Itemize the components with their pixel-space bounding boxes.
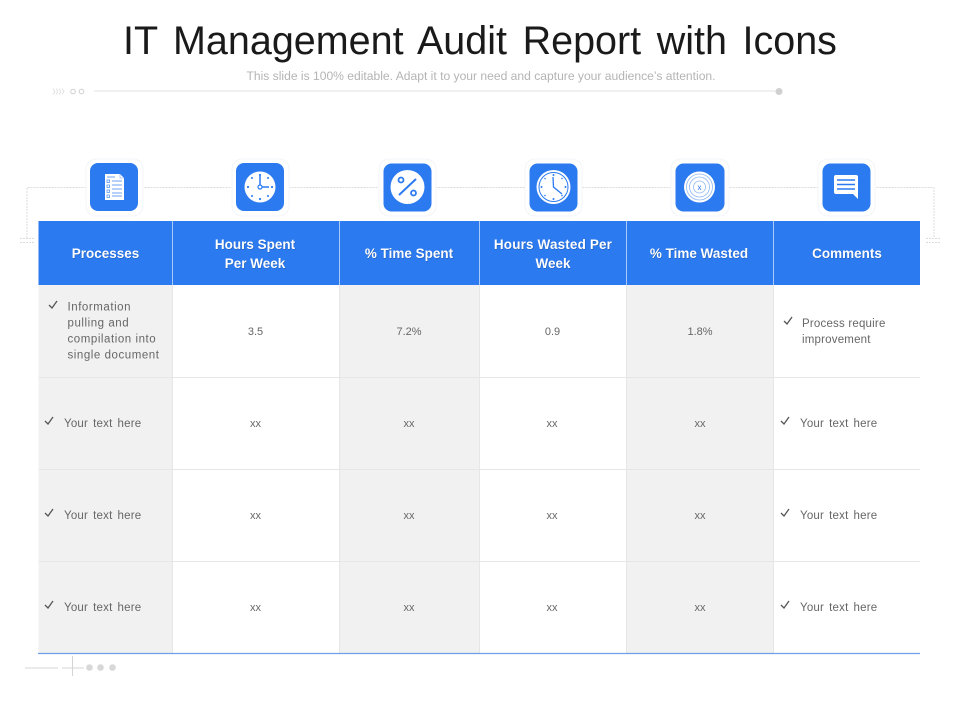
table header: % Time Wasted <box>650 246 748 261</box>
row 4 text: xx <box>546 602 558 614</box>
icon: coin target: x <box>698 183 702 192</box>
row 1 text: improvement <box>802 334 871 346</box>
row 4 text: Your text here <box>64 602 141 614</box>
grid lines <box>38 285 920 653</box>
row 3 text: Your text here <box>800 510 877 522</box>
row 1 text: single document <box>68 350 160 362</box>
table header: Week <box>536 256 571 272</box>
icon: percent <box>379 159 436 216</box>
table header: Hours Wasted Per <box>494 237 613 252</box>
row 1 text: Process require <box>802 318 886 330</box>
row 1 text: 7.2% <box>396 326 422 338</box>
table header: Per Week <box>225 256 286 272</box>
table header: Hours Spent <box>215 238 296 252</box>
row 2 text: xx <box>250 418 262 430</box>
table header: Hours Spent <box>215 237 296 252</box>
row 1 text: compilation into <box>68 334 156 346</box>
row 1 text: 3.5 <box>248 326 263 338</box>
table header: Comments <box>812 246 882 261</box>
icon: coin target <box>671 159 729 216</box>
table header: Processes <box>72 246 140 262</box>
table header: Hours Wasted Per <box>494 238 613 252</box>
header divider ornament <box>53 88 782 95</box>
table header: Processes <box>72 246 139 261</box>
icon: document <box>86 159 143 216</box>
table header: % Time Wasted <box>650 246 749 262</box>
row 2 text: xx <box>404 418 415 430</box>
table header: % Time Spent <box>365 246 454 261</box>
title: IT Management Audit Report with Icons <box>123 19 837 63</box>
table header: % Time Spent <box>365 246 454 262</box>
shaded columns <box>38 285 774 653</box>
table header <box>38 221 920 285</box>
table header: Week <box>535 256 571 271</box>
table header: Comments <box>813 246 882 262</box>
row 2 text: Your text here <box>800 418 877 430</box>
table body <box>38 285 920 654</box>
row 3 text <box>45 509 877 522</box>
row 1 text: Information <box>68 302 131 314</box>
row 4 text: Your text here <box>800 602 877 614</box>
footer ornament <box>25 656 116 676</box>
row 2 text <box>45 417 877 430</box>
row 3 text: xx <box>546 510 558 522</box>
row 3 text: xx <box>694 510 706 522</box>
row 4 text: xx <box>694 602 706 614</box>
icon: wall clock <box>525 159 582 216</box>
row 1 text: pulling and <box>68 318 129 330</box>
row 4 text <box>45 601 877 614</box>
subtitle: This slide is 100% editable. Adapt it to your need and capture your audience’s attention. <box>246 69 716 83</box>
row 3 text: Your text here <box>64 510 141 522</box>
row 4 text: xx <box>250 602 262 614</box>
table header: Per Week <box>225 256 286 271</box>
icon: comment bubble <box>818 159 875 216</box>
row 1 text: 0.9 <box>545 326 560 338</box>
row 3 text: xx <box>404 510 415 522</box>
row 4 text: xx <box>404 602 415 614</box>
connector line behind icons <box>20 188 941 242</box>
row 1 text <box>49 301 886 362</box>
icon: clock <box>232 159 289 216</box>
row 2 text: Your text here <box>64 418 141 430</box>
row 2 text: xx <box>546 418 558 430</box>
row 1 text: 1.8% <box>687 326 713 338</box>
row 2 text: xx <box>694 418 706 430</box>
row 3 text: xx <box>250 510 262 522</box>
